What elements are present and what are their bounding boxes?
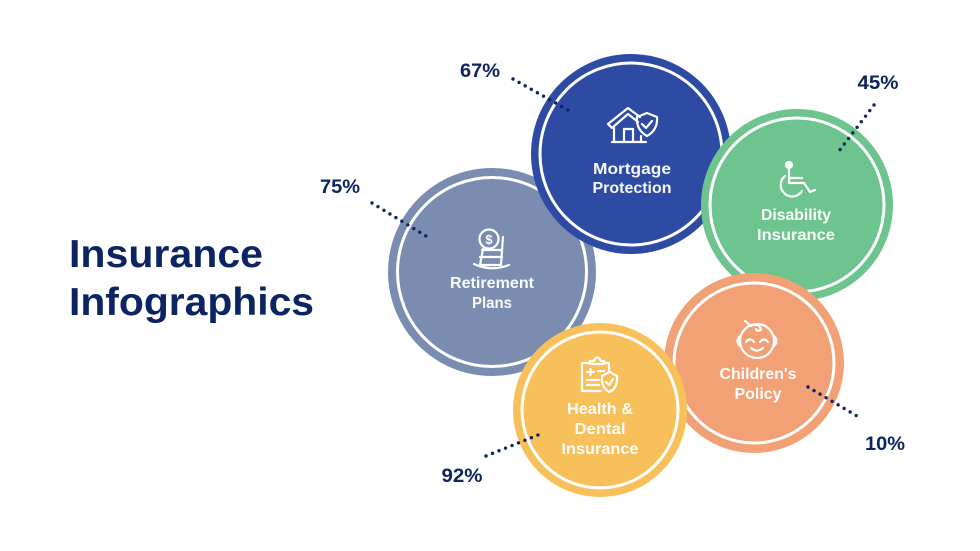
callout: 45% (836, 73, 899, 155)
callout: 92% (442, 433, 543, 487)
panel: mortgage protection (531, 54, 731, 254)
label: health and dental insurance: Health & (567, 401, 633, 418)
label: disability insurance: Insurance (757, 227, 835, 244)
callout: 92%: 92% (442, 466, 483, 487)
label: children's policy: Children's (720, 366, 797, 383)
label: mortgage protection: Mortgage (593, 161, 671, 178)
label: disability insurance (757, 207, 835, 244)
icon: baby face (738, 321, 776, 358)
icon: wheelchair (781, 162, 815, 196)
panel: children's policy (664, 273, 844, 453)
icon: rocking chair with coin (474, 230, 509, 268)
label: retirement plans: Plans (472, 295, 512, 312)
panel: disability insurance (701, 109, 893, 301)
panel: retirement plans (388, 168, 596, 376)
label: children's policy: Policy (734, 386, 782, 403)
icon: house with shield (608, 108, 657, 142)
label: health and dental insurance: Insurance (562, 441, 639, 458)
title (69, 233, 314, 324)
label: retirement plans: Retirement (450, 275, 535, 292)
label: health and dental insurance (562, 401, 639, 458)
callout: 67%: 67% (460, 61, 500, 82)
callout: 67% (460, 61, 568, 110)
callout: 75% (320, 177, 426, 236)
label: retirement plans (450, 275, 535, 312)
icon: clipboard with shield (582, 358, 617, 392)
callout: 10%: 10% (865, 434, 905, 455)
title: Insurance (69, 233, 263, 276)
title: Infographics (69, 281, 314, 324)
panel: health and dental insurance (513, 323, 687, 497)
callout: 45%: 45% (858, 73, 899, 94)
icon: rocking chair with coin: $ (485, 232, 493, 247)
callout: 10% (808, 387, 905, 455)
label: mortgage protection (592, 161, 672, 197)
label: mortgage protection: Protection (592, 180, 672, 197)
label: children's policy (720, 366, 797, 403)
label: disability insurance: Disability (761, 207, 831, 224)
label: health and dental insurance: Dental (574, 421, 626, 438)
callout: 75%: 75% (320, 177, 360, 198)
